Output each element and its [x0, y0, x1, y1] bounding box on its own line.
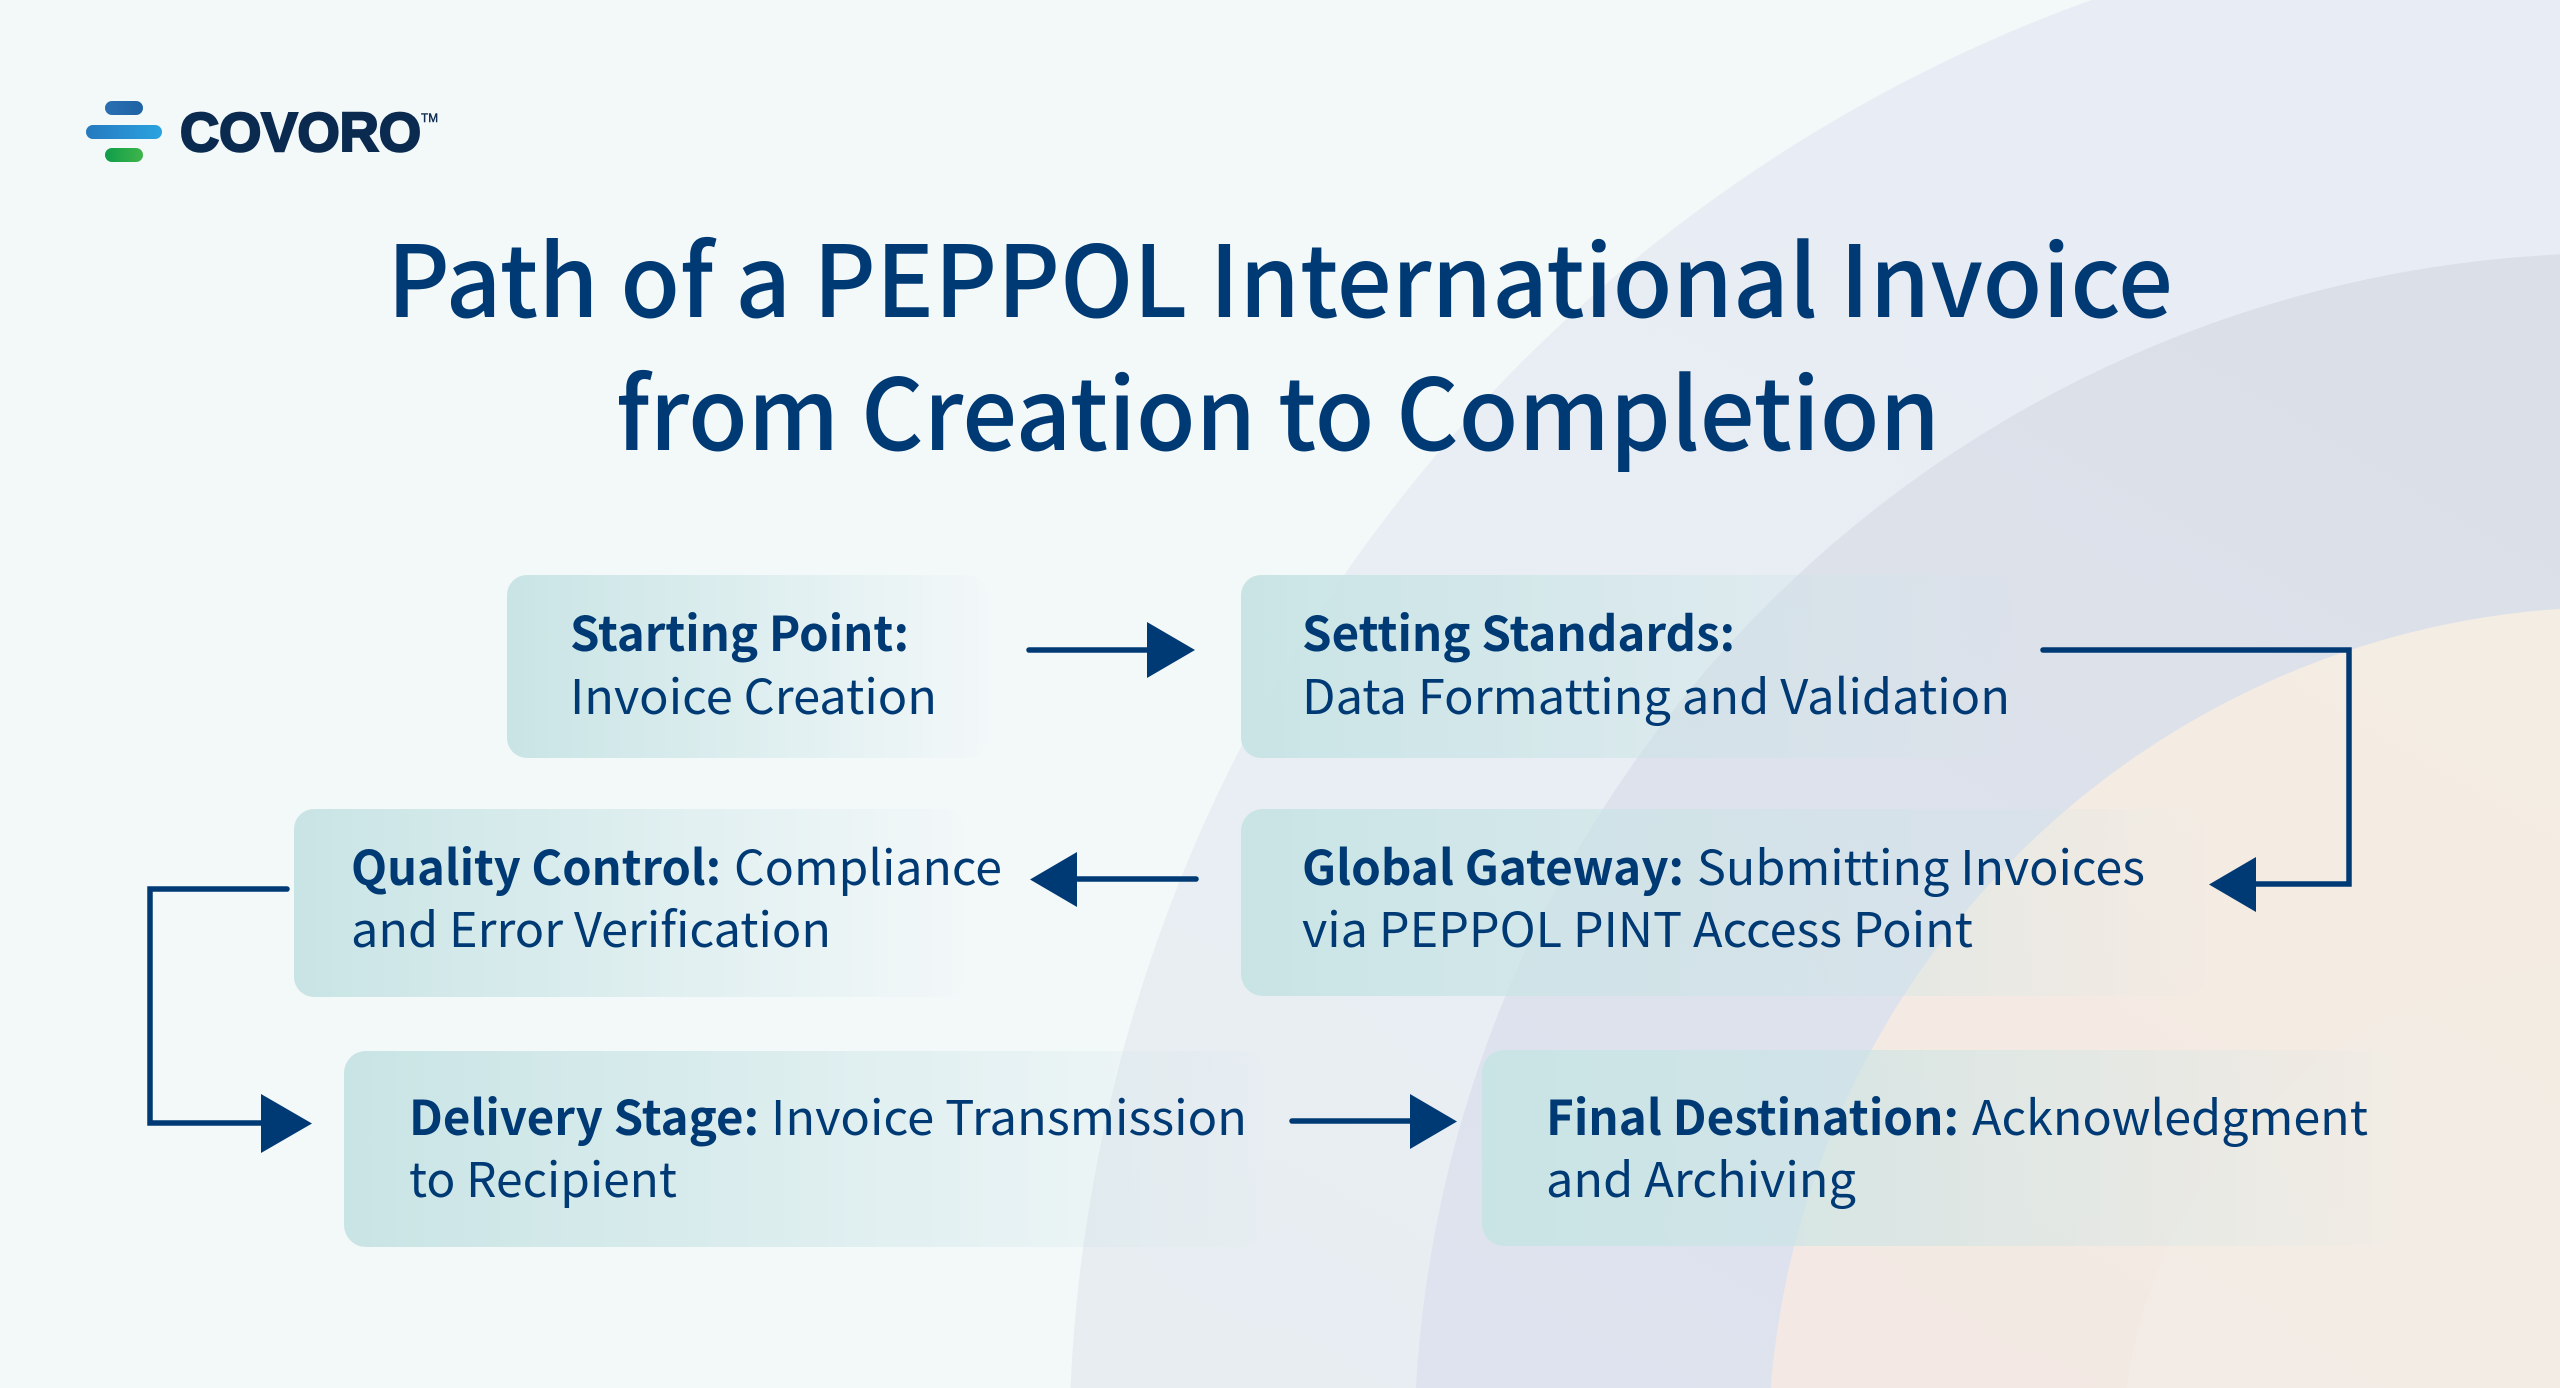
step box: Delivery Stage: Delivery Stage: [409, 1079, 759, 1149]
arrow: Quality Control to Delivery Stage [150, 889, 312, 1153]
title: from Creation to Completion [616, 335, 1940, 479]
step box: Global Gateway: Global Gateway: [1302, 829, 1684, 899]
title [387, 202, 2173, 479]
step box: Starting Point [507, 575, 987, 758]
step box: Setting Standards: Setting Standards: [1302, 595, 1735, 665]
step box: Setting Standards: Data Formatting and Validation [1302, 658, 2010, 728]
arrow: Delivery Stage to Final Destination [1292, 1094, 1457, 1149]
title: Path of a PEPPOL International Invoice [387, 202, 2173, 346]
step box: Final Destination: Final Destination: [1546, 1079, 1959, 1149]
arrow: Starting Point to Setting Standards [1029, 622, 1195, 678]
step box: Starting Point: Starting Point: [570, 595, 909, 665]
step box: Final Destination: Acknowledgment [1972, 1079, 2368, 1149]
step box: Quality Control [294, 809, 1002, 997]
step box: Final Destination [1482, 1050, 2407, 1246]
arrow: Global Gateway to Quality Control [1030, 852, 1196, 907]
step box: Delivery Stage [344, 1051, 1264, 1247]
arrow: Setting Standards to Global Gateway [2043, 650, 2349, 912]
step box: Delivery Stage: Invoice Transmission [771, 1079, 1247, 1149]
logo: Covoro: COVORO [180, 101, 421, 163]
step box: Global Gateway [1241, 809, 2206, 996]
step box: Quality Control: Quality Control: [351, 829, 721, 899]
logo: Covoro [86, 101, 438, 163]
step box: Starting Point: Invoice Creation [570, 658, 937, 728]
step box: Setting Standards [1241, 575, 2031, 758]
step box: Delivery Stage: to Recipient [409, 1141, 677, 1211]
step box: Global Gateway: via PEPPOL PINT Access Point [1302, 891, 1973, 961]
step box: Quality Control: and Error Verification [351, 891, 831, 961]
step box: Global Gateway: Submitting Invoices [1697, 829, 2145, 899]
step box: Quality Control: Compliance [734, 829, 1002, 899]
step box: Final Destination: and Archiving [1546, 1141, 1856, 1211]
logo: Covoro: TM [421, 111, 438, 125]
